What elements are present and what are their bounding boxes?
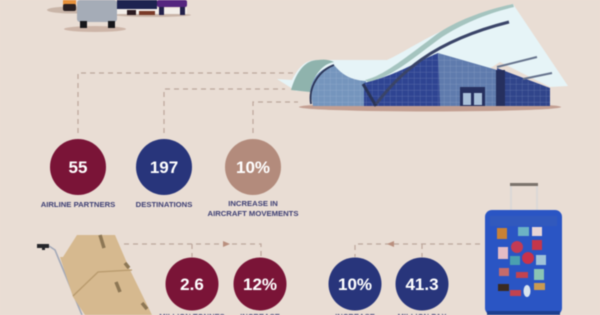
roof bbox=[277, 4, 568, 100]
stat: cargo increase bbox=[234, 258, 286, 315]
building bbox=[310, 65, 366, 106]
dashed connector with arrow: cargo to stats bbox=[124, 241, 261, 257]
illustration: travellers with luggage bbox=[47, 0, 191, 32]
illustration: airport terminal bbox=[277, 4, 568, 112]
stat: passenger increase bbox=[328, 258, 382, 315]
stat: cargo tonnes bbox=[159, 258, 225, 315]
roof edge main bbox=[365, 4, 514, 82]
stat: airline partners bbox=[41, 139, 115, 209]
dashed connector with arrow: suitcase to stats bbox=[355, 241, 480, 257]
stat: cargo increase: 12% bbox=[243, 275, 277, 294]
illustration: cargo boxes on hand truck bbox=[37, 235, 152, 315]
stat: increase in aircraft movements: 10% bbox=[236, 158, 270, 177]
stat: million passengers: 41.3 bbox=[405, 275, 439, 294]
stat: million passengers bbox=[396, 258, 448, 315]
stat: airline partners: AIRLINE PARTNERS bbox=[41, 200, 115, 209]
stat: increase in aircraft movements: INCREASE IN bbox=[228, 199, 278, 208]
stat: cargo tonnes: 2.6 bbox=[180, 275, 204, 294]
roof edge left hump bbox=[291, 60, 334, 92]
stat: destinations bbox=[136, 139, 192, 209]
stat: passenger increase: 10% bbox=[338, 275, 372, 294]
stat: destinations: DESTINATIONS bbox=[136, 200, 192, 209]
stat: increase in aircraft movements bbox=[208, 139, 298, 218]
illustration: blue suitcase with stickers bbox=[485, 183, 562, 315]
dashed connectors: airport to stats bbox=[78, 73, 298, 133]
stat: destinations: 197 bbox=[150, 158, 178, 177]
stat: airline partners: 55 bbox=[69, 158, 87, 177]
stat: increase in aircraft movements: AIRCRAFT MOVEMENTS bbox=[208, 209, 298, 218]
